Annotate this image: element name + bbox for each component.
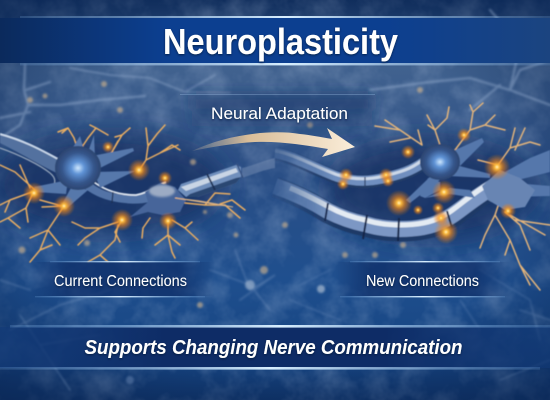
dendrites: current connections — [0, 125, 245, 262]
dendrites: new connections — [375, 103, 550, 290]
neuron branches: new connections — [406, 138, 550, 203]
label: new connections: New Connections — [366, 273, 479, 290]
soma branches: tapered — [34, 135, 135, 209]
glowing synapses: new — [337, 128, 516, 244]
soma: left neuron — [55, 146, 101, 190]
dark shading behind neurons — [0, 135, 535, 240]
panel: bottom band — [0, 325, 550, 370]
axon: current connections left — [0, 133, 70, 178]
panel: current connections label — [30, 261, 215, 297]
axon: between somas — [82, 180, 168, 204]
myelin cylinder: current — [178, 158, 275, 197]
panel: neural adaptation heading — [180, 94, 375, 135]
arrow: current to new connections — [192, 128, 355, 157]
upper axon: new connections — [275, 151, 428, 187]
lower myelinated axon: new connections — [275, 182, 495, 241]
soma: lower right neuron — [482, 170, 535, 210]
soma: upper right neuron — [420, 144, 460, 180]
faint background particles — [18, 81, 423, 384]
glowing synapses: current — [23, 141, 177, 231]
panel: new connections label — [335, 261, 510, 297]
illustration: current connections neurons — [0, 125, 275, 262]
illustration: new connections neurons — [275, 103, 550, 290]
heading: neural adaptation: Neural Adaptation — [211, 104, 348, 123]
title: Neuroplasticity — [163, 21, 398, 62]
soma: second neuron — [130, 183, 186, 217]
label: current connections: Current Connections — [54, 273, 187, 290]
panel: title band — [0, 16, 550, 65]
subtitle: Supports Changing Nerve Communication — [84, 336, 462, 359]
